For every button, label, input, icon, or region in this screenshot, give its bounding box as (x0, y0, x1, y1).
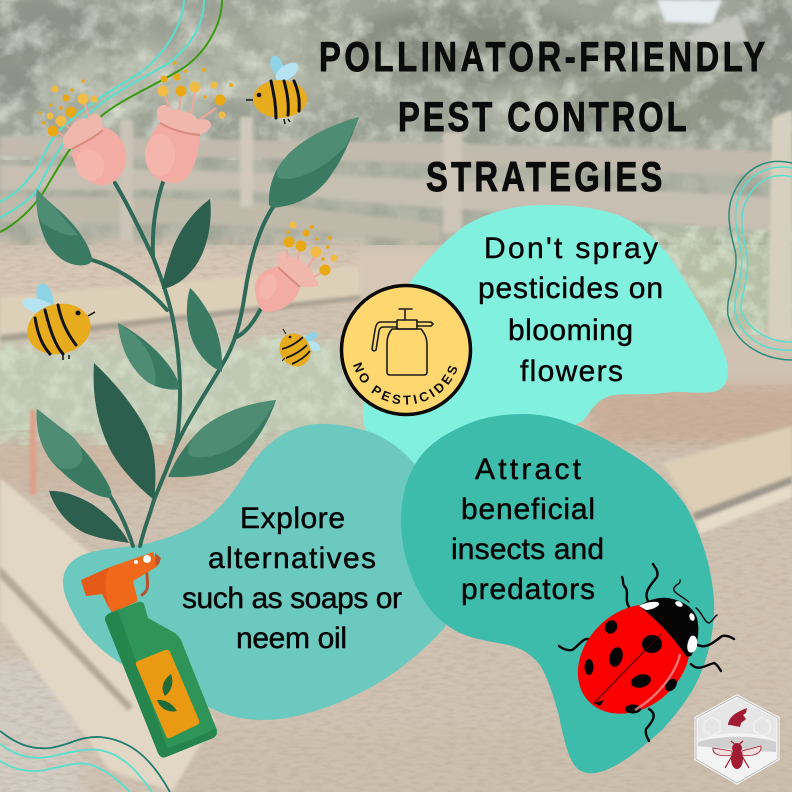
text: explore alternatives: neem oil (236, 622, 347, 655)
text: attract beneficial insects (451, 453, 604, 606)
icon: ladybug (556, 564, 734, 741)
leaf: right (168, 400, 276, 477)
icon: bee left (21, 281, 95, 360)
logo: WSU hexagon badge (696, 696, 778, 783)
ladybug spots (584, 618, 679, 714)
flower: right (255, 222, 338, 312)
blob: explore alternatives panel (63, 424, 446, 720)
blob: don't spray panel (363, 205, 728, 480)
text: explore alternatives: Explore (240, 502, 345, 535)
icon: no pesticides badge (340, 284, 472, 416)
leaf: upper left (36, 189, 92, 265)
leaf: upper centre dark (162, 199, 211, 289)
icon: bee small (274, 328, 322, 372)
text: don't spray (478, 232, 663, 388)
text: don't spray: pesticides on (478, 272, 663, 305)
plant stems (92, 182, 273, 546)
ground straw texture (0, 240, 360, 340)
leaf: lower left (37, 409, 112, 498)
ladybug head (639, 598, 698, 657)
icon: no pesticides badge: NO PESTICIDES (353, 362, 457, 405)
foliage mottling (0, 0, 792, 245)
text: attract beneficial insects: beneficial (461, 493, 595, 526)
fence (0, 136, 792, 177)
title: POLLINATOR-FRIENDLY (319, 33, 765, 80)
decorative curves: top left (0, 0, 222, 232)
text: don't spray: blooming (508, 314, 633, 347)
decorative curves: right side (728, 161, 792, 360)
blob: attract beneficial panel (401, 414, 714, 773)
bottle body (105, 602, 217, 758)
flower: top left (38, 79, 126, 185)
bottom left bed (0, 478, 215, 792)
decorative curves: bottom left (0, 731, 170, 792)
text: attract beneficial insects: insects and (451, 533, 604, 566)
text: attract beneficial insects: Attract (475, 453, 582, 486)
text: attract beneficial insects: predators (461, 573, 595, 606)
title: STRATEGIES (426, 153, 662, 200)
bottle label (136, 650, 199, 738)
title (319, 33, 765, 200)
leaf: middle (187, 288, 222, 372)
title: PEST CONTROL (398, 93, 687, 140)
text: explore alternatives: alternatives (208, 542, 376, 575)
right bed (663, 426, 792, 513)
leaf: bottom left dark (49, 491, 129, 543)
ladybug legs (559, 564, 734, 741)
cougar mark (728, 708, 747, 727)
ladybug shell (556, 582, 712, 736)
leaf: middle left (118, 323, 180, 390)
icon: bee top (246, 54, 307, 124)
text: don't spray: Don't spray (484, 232, 658, 265)
flower: top centre (145, 61, 233, 183)
leaves (36, 117, 359, 543)
text: explore alternatives: such as soaps or (182, 582, 402, 615)
icon: spray bottle (81, 552, 217, 758)
bottle head (81, 552, 158, 613)
text: don't spray: flowers (520, 355, 623, 388)
leaf: large dark (94, 363, 155, 500)
bee mark (713, 741, 761, 769)
leaf: top right (269, 117, 359, 208)
text: explore alternatives (182, 502, 402, 655)
left plank (0, 266, 360, 335)
